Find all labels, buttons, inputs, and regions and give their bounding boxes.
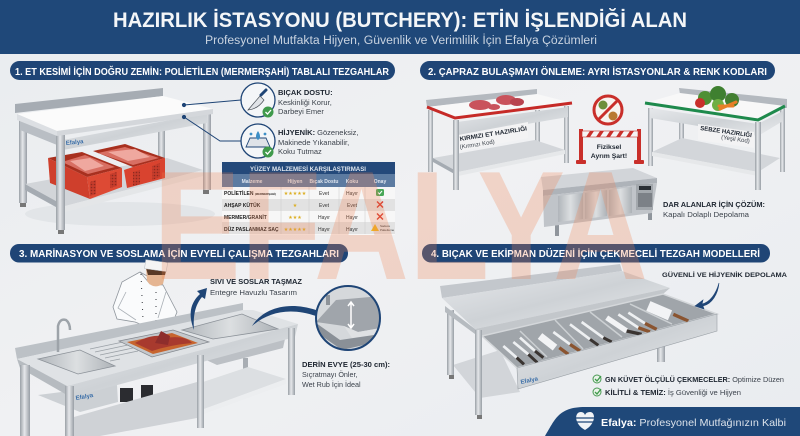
callout: narrow spaces: Kapalı Dolaplı Depolama bbox=[663, 210, 749, 219]
heading pill 2 bbox=[420, 61, 775, 80]
callout: overflow: SIVI VE SOSLAR TAŞMAZ bbox=[210, 277, 303, 286]
title: HAZIRLIK İSTASYONU (BUTCHERY): ETİN İŞLENDİĞİ ALAN bbox=[113, 8, 687, 32]
illustration: green coded table: (Yeşil Kod) bbox=[721, 135, 750, 145]
callout: deep sink: Sıçratmayı Önler, bbox=[302, 370, 358, 379]
callout: knife friendly: Darbeyi Emer bbox=[278, 107, 324, 116]
comparison table: Hayır bbox=[346, 227, 358, 233]
barrier: physical separation: Ayrım Şart! bbox=[591, 153, 627, 160]
comparison table: Evet bbox=[319, 203, 330, 209]
brand tagline: Efalya: Profesyonel Mutfağınızın Kalbi bbox=[601, 417, 786, 429]
comparison table: ★★★★★ bbox=[284, 227, 307, 233]
comparison table: Hayır bbox=[346, 215, 358, 221]
icon: no bacteria sign bbox=[594, 96, 622, 124]
illustration: red coded table bbox=[426, 89, 572, 190]
footer brand band bbox=[545, 407, 800, 436]
illustration: sink workbench with chef bbox=[15, 260, 298, 436]
comparison table: Onay bbox=[374, 179, 386, 185]
illustration: closed cabinet counter bbox=[541, 168, 657, 236]
callout: hygiene: HİJYENİK: Gözeneksiz, bbox=[278, 128, 358, 137]
comparison table: Malzeme bbox=[242, 179, 263, 185]
comparison table bbox=[222, 162, 395, 235]
comparison table: Evet bbox=[347, 203, 358, 209]
feature list: GN KÜVET ÖLÇÜLÜ ÇEKMECELER: Optimize Düzen bbox=[605, 375, 784, 384]
comparison table: DÜZ PASLANMAZ SAÇ bbox=[224, 226, 279, 233]
comparison table: Koku bbox=[346, 179, 358, 185]
callout: deep sink bbox=[302, 360, 390, 389]
comparison table: Hijyen bbox=[287, 179, 303, 185]
callout: overflow: Entegre Havuzlu Tasarım bbox=[210, 288, 297, 297]
comparison table: POLİETİLEN (MERMERŞAHİ) bbox=[224, 190, 276, 197]
meat tray bbox=[119, 330, 209, 357]
feature list: KİLİTLİ & TEMİZ: İş Güvenliği ve Hijyen bbox=[605, 388, 741, 397]
subtitle: Profesyonel Mutfakta Hijyen, Güvenlik ve Verimlilik İçin Efalya Çözümleri bbox=[205, 34, 597, 47]
barrier: physical separation bbox=[576, 129, 644, 164]
watermark: EFALYA bbox=[153, 139, 648, 312]
drawer bbox=[482, 294, 717, 368]
arrow: sink to zoom circle bbox=[252, 306, 316, 326]
comparison table: Hayır bbox=[318, 227, 330, 233]
comparison table: Bıçak Dostu bbox=[310, 179, 338, 185]
label: safe storage: GÜVENLİ VE HİJYENİK DEPOLAMA bbox=[662, 270, 787, 279]
comparison table: ★★★ bbox=[288, 215, 302, 221]
detail circle: deep sink bbox=[316, 286, 381, 350]
heading pill 1 bbox=[10, 61, 395, 80]
heading pill 2: 2. ÇAPRAZ BULAŞMAYI ÖNLEME: AYRI İSTASYONLAR & RENK KODLARI bbox=[428, 65, 767, 78]
callout: hygiene bbox=[278, 128, 358, 156]
callout: narrow spaces: DAR ALANLAR İÇİN ÇÖZÜM: bbox=[663, 200, 765, 209]
illustration: drawer table with knives bbox=[440, 264, 717, 419]
panel: section 4 drawer tables bbox=[422, 244, 787, 419]
illustration: sink workbench with chef: Efalya bbox=[75, 393, 94, 402]
icon: hygiene bbox=[241, 124, 275, 158]
heading pill 1: 1. ET KESİMİ İÇİN DOĞRU ZEMİN: POLİETİLEN (MERMERŞAHİ) TABLALI TEZGAHLAR bbox=[15, 65, 389, 78]
comparison table: ★★★★★ bbox=[284, 191, 307, 197]
illustration: white-top table with red crates bbox=[15, 88, 215, 234]
comparison table: Hayır bbox=[346, 191, 358, 197]
callout: hygiene: Makinede Yıkanabilir, bbox=[278, 138, 349, 147]
comparison table: YÜZEY MALZEMESİ KARŞILAŞTIRMASI bbox=[250, 166, 366, 173]
icon: Efalya heart logo bbox=[575, 412, 595, 430]
callout: narrow spaces bbox=[663, 200, 765, 219]
heading pill 3 bbox=[10, 244, 348, 262]
callout: knife friendly bbox=[278, 88, 333, 116]
connector lines bbox=[182, 100, 241, 141]
feature list bbox=[593, 375, 784, 397]
sink left bbox=[38, 350, 115, 374]
header band bbox=[0, 0, 800, 54]
comparison table: Hayır bbox=[318, 215, 330, 221]
illustration: red coded table: (Kırmızı Kod) bbox=[459, 140, 495, 151]
illustration: green coded table bbox=[645, 86, 787, 190]
figure: chef bbox=[113, 260, 177, 337]
illustration: red coded table: KIRMIZI ET HAZIRLIĞI bbox=[459, 124, 528, 143]
comparison table: Sadece bbox=[380, 224, 391, 228]
callout: hygiene: Koku Tutmaz bbox=[278, 147, 322, 156]
comparison table: MERMER/GRANİT bbox=[224, 214, 267, 221]
arrow: to drawer bbox=[695, 283, 719, 309]
callout: knife friendly: Keskinliği Korur, bbox=[278, 98, 332, 107]
barrier: physical separation: Fiziksel bbox=[597, 144, 621, 151]
comparison table: AHŞAP KÜTÜK bbox=[224, 202, 261, 209]
icon: knife friendly bbox=[241, 83, 275, 118]
heading pill 4 bbox=[422, 244, 770, 262]
heading pill 4: 4. BIÇAK VE EKİPMAN DÜZENİ İÇİN ÇEKMECELİ TEZGAH MODELLERİ bbox=[431, 247, 760, 260]
panel: section 2 cross contamination bbox=[420, 61, 787, 236]
callout: overflow bbox=[210, 277, 303, 297]
arrow: up to overflow note bbox=[191, 288, 207, 330]
comparison table: Evet bbox=[319, 191, 330, 197]
callout: deep sink: DERİN EVYE (25-30 cm): bbox=[302, 360, 390, 369]
illustration: drawer table with knives: Efalya bbox=[520, 376, 539, 386]
sink right bbox=[182, 314, 278, 339]
panel: section 1 polyethylene tables bbox=[10, 61, 395, 235]
panel: section 3 sink tables bbox=[10, 244, 390, 436]
comparison table: Paketleme bbox=[380, 228, 395, 232]
illustration: white-top table with red crates: Efalya bbox=[66, 139, 84, 147]
comparison table: ★ bbox=[293, 203, 298, 209]
heading pill 3: 3. MARİNASYON VE SOSLAMA İÇİN EVYELİ ÇALIŞMA TEZGAHLARI bbox=[19, 247, 339, 260]
callout: deep sink: Wet Rub İçin İdeal bbox=[302, 380, 361, 389]
illustration: green coded table: SEBZE HAZIRLIĞI bbox=[700, 124, 753, 139]
callout: knife friendly: BIÇAK DOSTU: bbox=[278, 88, 333, 97]
